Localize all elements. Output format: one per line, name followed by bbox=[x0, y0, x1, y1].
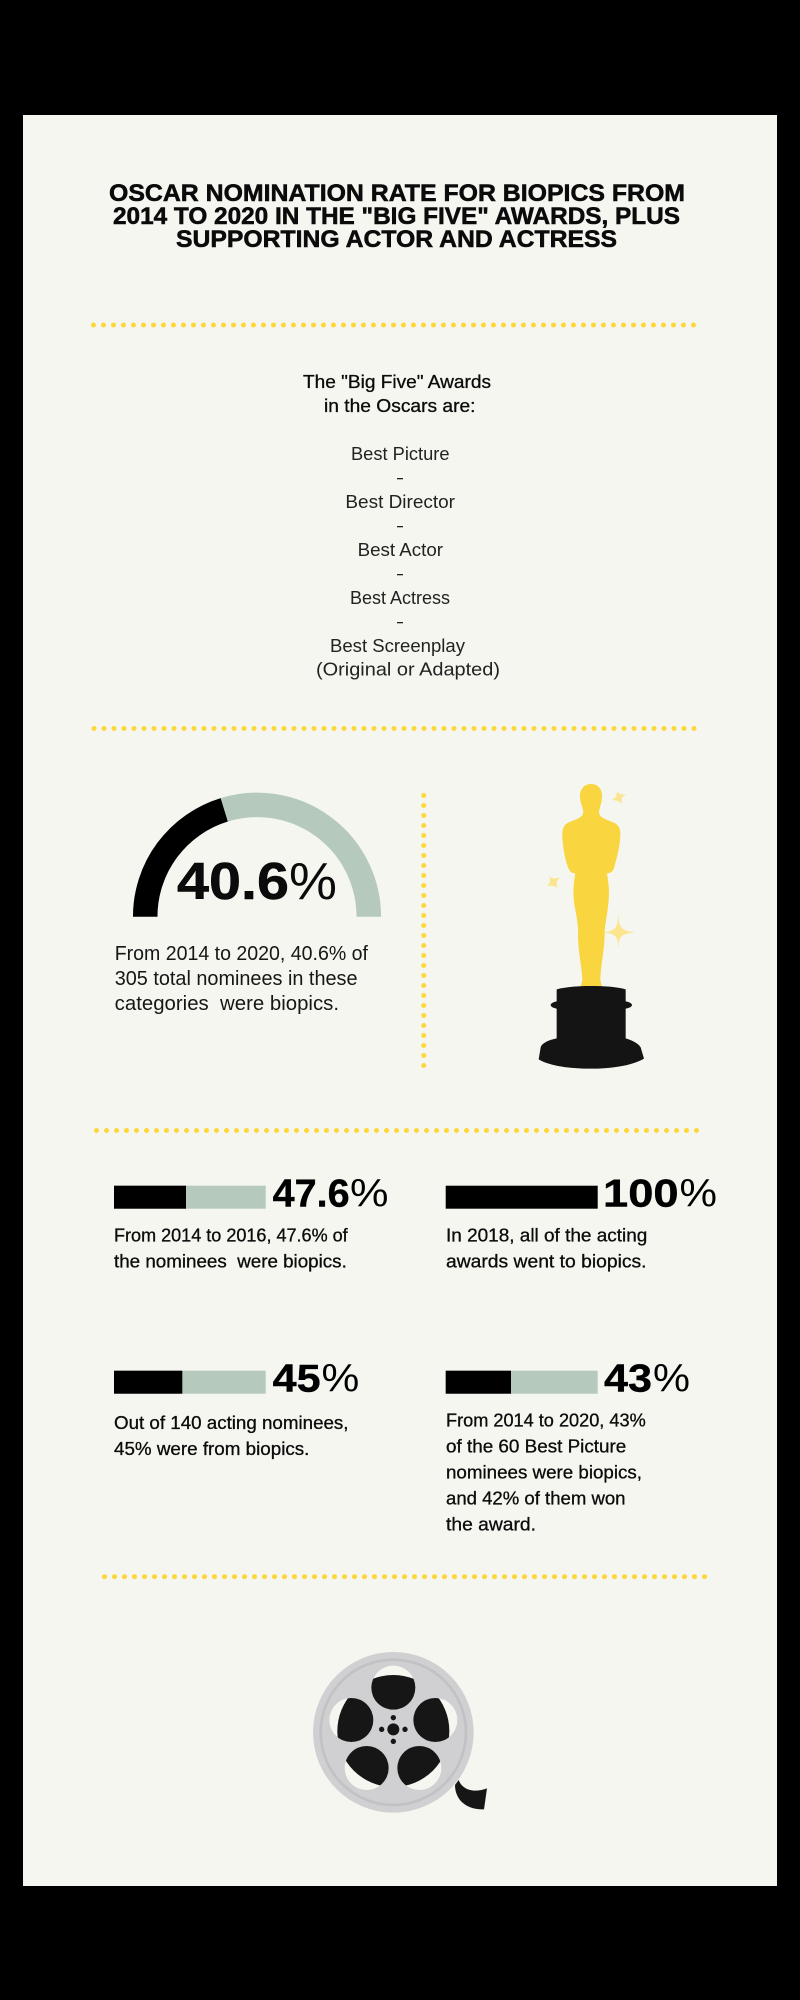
description: From 2014 to 2016, 47.6% of bbox=[114, 1226, 349, 1246]
value: 47.6%: % bbox=[350, 1172, 388, 1216]
description: the nominees were biopics. bbox=[114, 1252, 347, 1272]
bar: 47.6% bbox=[114, 1186, 266, 1209]
gauge description: categories were biopics. bbox=[115, 993, 339, 1015]
icon: Oscar statue bbox=[539, 784, 644, 1069]
value: 43%: 43 bbox=[604, 1358, 652, 1400]
gauge value bbox=[177, 853, 337, 911]
value: 45% bbox=[273, 1358, 359, 1400]
bar: 45% bbox=[114, 1371, 266, 1394]
list of awards: Best Director bbox=[345, 491, 455, 512]
panel: stat 45% bbox=[114, 1358, 359, 1459]
description: Out of 140 acting nominees, bbox=[114, 1413, 348, 1433]
statue figure bbox=[562, 784, 620, 987]
value: 47.6%: 47.6 bbox=[273, 1172, 350, 1216]
list of awards: Best Screenplay bbox=[330, 635, 466, 656]
description bbox=[114, 1226, 349, 1272]
value: 100%: 100 bbox=[603, 1172, 679, 1216]
gauge value: % bbox=[289, 853, 337, 911]
gauge value: 40.6 bbox=[177, 853, 289, 911]
title: 2014 TO 2020 IN THE "BIG FIVE" AWARDS, PLUS bbox=[113, 203, 680, 230]
panel: stat 100% bbox=[446, 1172, 717, 1272]
gauge chart: 40.6% bbox=[145, 805, 369, 917]
panel: overall rate gauge bbox=[115, 805, 369, 1015]
value: 100% bbox=[603, 1172, 717, 1216]
value: 43% bbox=[604, 1358, 690, 1400]
value: 45%: % bbox=[322, 1358, 359, 1400]
list of awards bbox=[316, 443, 500, 680]
description: the award. bbox=[446, 1515, 536, 1535]
gauge description bbox=[115, 943, 368, 1015]
heading: Big Five awards: The "Big Five" Awards bbox=[303, 371, 491, 392]
description: nominees were biopics, bbox=[446, 1463, 642, 1483]
panel: stat 47.6% bbox=[114, 1172, 388, 1272]
description: From 2014 to 2020, 43% bbox=[446, 1411, 646, 1431]
gauge description: From 2014 to 2020, 40.6% of bbox=[115, 943, 368, 965]
description bbox=[446, 1226, 647, 1272]
description bbox=[114, 1413, 348, 1459]
panel: stat 43% bbox=[446, 1358, 690, 1535]
bar: 43% bbox=[446, 1371, 598, 1394]
value: 100%: % bbox=[680, 1172, 717, 1216]
list of awards: (Original or Adapted) bbox=[316, 658, 500, 680]
list of awards: Best Picture bbox=[351, 443, 450, 464]
title: OSCAR NOMINATION RATE FOR BIOPICS FROM bbox=[109, 180, 685, 207]
icon: film reel bbox=[313, 1652, 487, 1813]
value: 43%: % bbox=[653, 1358, 690, 1400]
title bbox=[109, 180, 685, 253]
heading: Big Five awards: in the Oscars are: bbox=[324, 395, 476, 416]
heading: Big Five awards bbox=[303, 371, 491, 416]
description: awards went to biopics. bbox=[446, 1252, 646, 1272]
description: 45% were from biopics. bbox=[114, 1439, 309, 1459]
description bbox=[446, 1411, 646, 1535]
description: In 2018, all of the acting bbox=[446, 1226, 647, 1246]
bar: 100% bbox=[446, 1186, 598, 1209]
value: 47.6% bbox=[273, 1172, 388, 1216]
value: 45%: 45 bbox=[273, 1358, 321, 1400]
description: and 42% of them won bbox=[446, 1489, 626, 1509]
sparkles bbox=[547, 790, 635, 949]
list of awards: Best Actress bbox=[350, 587, 450, 608]
statue base bbox=[539, 986, 644, 1069]
title: SUPPORTING ACTOR AND ACTRESS bbox=[176, 226, 617, 253]
list of awards: Best Actor bbox=[358, 539, 443, 560]
panel: Big Five awards list bbox=[303, 371, 500, 680]
description: of the 60 Best Picture bbox=[446, 1437, 626, 1457]
gauge description: 305 total nominees in these bbox=[115, 968, 358, 990]
